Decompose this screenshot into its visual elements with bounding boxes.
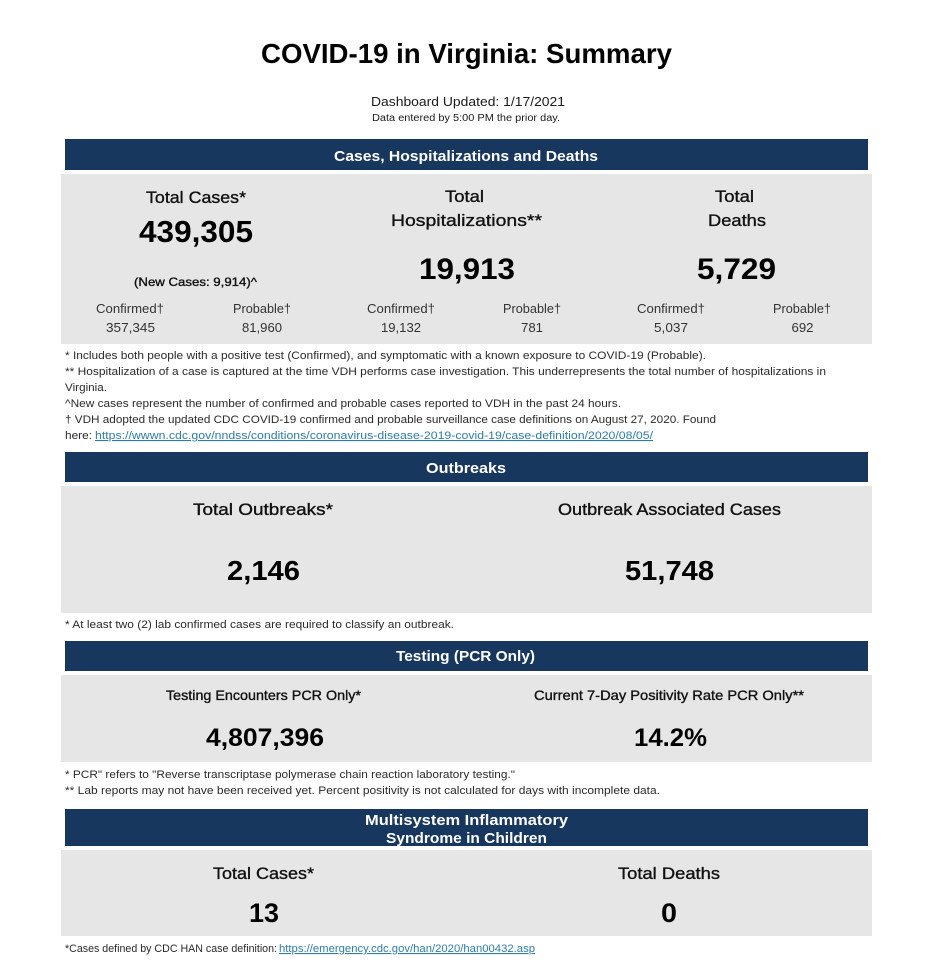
testing encounters: Testing Encounters PCR Only* [166, 687, 362, 703]
footnotes: cases: https://wwwn.cdc.gov/nndss/conditions/coronavirus-disease-2019-covid-19/case-definition/2020/08/05/ [95, 430, 654, 442]
panel: outbreaks [61, 486, 872, 613]
MIS-C total deaths [618, 864, 720, 928]
total hospitalizations: Total [445, 187, 484, 206]
footnotes: cases: * Includes both people with a positive test (Confirmed), and symptomatic with a known exposure to COVID-19 (Probable). [65, 350, 706, 362]
heading: testing: Testing (PCR Only) [396, 648, 535, 665]
positivity rate [534, 687, 805, 752]
total hospitalizations: Hospitalizations** [391, 211, 542, 230]
footnotes: cases [65, 350, 826, 442]
MIS-C total cases [213, 864, 314, 928]
heading: outbreaks: Outbreaks [426, 460, 506, 477]
total cases: Confirmed† [96, 302, 164, 316]
testing encounters: 4,807,396 [206, 724, 324, 752]
footnotes: cases: Virginia. [65, 382, 107, 394]
footnote: outbreaks: * At least two (2) lab confirmed cases are required to classify an outbreak. [65, 619, 454, 631]
panel: testing [61, 675, 872, 762]
footnotes: testing: * PCR" refers to "Reverse transcriptase polymerase chain reaction laboratory testing." [65, 769, 515, 781]
total hospitalizations: Probable† [503, 302, 561, 316]
heading: multisystem inflammatory syndrome in children: Syndrome in Children [386, 830, 547, 847]
total hospitalizations: 781 [521, 321, 543, 335]
outbreak associated cases: 51,748 [625, 555, 714, 586]
panel: cases, hospitalizations and deaths [61, 174, 872, 344]
MIS-C total cases: 13 [249, 898, 279, 928]
total deaths: 5,037 [654, 321, 688, 335]
footnotes: cases: here: [65, 430, 92, 442]
MIS-C total deaths: 0 [661, 898, 677, 928]
outbreak associated cases [558, 500, 781, 586]
footnotes: cases: ^New cases represent the number of confirmed and probable cases reported to VDH in the past 24 hours. [65, 398, 621, 410]
dashboard update text: Dashboard Updated: 1/17/2021 [371, 94, 565, 109]
total cases: 357,345 [106, 321, 155, 335]
total hospitalizations: 19,132 [381, 321, 421, 335]
footnotes: testing [65, 769, 660, 797]
total hospitalizations [367, 187, 561, 335]
dashboard update text [371, 94, 565, 124]
testing encounters [166, 687, 362, 752]
heading: multisystem inflammatory syndrome in children: Multisystem Inflammatory [365, 812, 569, 829]
total deaths: Confirmed† [637, 302, 705, 316]
total deaths: Probable† [773, 302, 831, 316]
heading: testing [65, 641, 868, 671]
heading: cases, hospitalizations and deaths: Cases, Hospitalizations and Deaths [334, 148, 598, 165]
total hospitalizations: Confirmed† [367, 302, 435, 316]
total cases: 439,305 [139, 214, 253, 249]
total cases: Probable† [233, 302, 291, 316]
positivity rate: 14.2% [634, 724, 707, 752]
panel: multisystem inflammatory syndrome in children [61, 850, 872, 936]
footnotes: cases: ** Hospitalization of a case is captured at the time VDH performs case investigation. This underrepresents the total number of hospitalizations in [65, 366, 826, 378]
total deaths: Total [715, 187, 754, 206]
dashboard update text: Data entered by 5:00 PM the prior day. [372, 113, 560, 124]
footnote: MIS-C case definition [65, 943, 535, 955]
heading: multisystem inflammatory syndrome in children [65, 809, 868, 847]
footnotes: testing: ** Lab reports may not have been received yet. Percent positivity is not calculated for days with incomplete data. [65, 785, 660, 797]
total outbreaks: Total Outbreaks* [193, 500, 333, 519]
total hospitalizations: 19,913 [419, 253, 515, 286]
MIS-C total deaths: Total Deaths [618, 864, 720, 883]
total outbreaks [193, 500, 333, 586]
footnote: MIS-C case definition: *Cases defined by CDC HAN case definition: [65, 943, 277, 955]
total deaths: 692 [792, 321, 814, 335]
total deaths [637, 187, 831, 335]
total outbreaks: 2,146 [227, 555, 300, 586]
footnote: MIS-C case definition: https://emergency.cdc.gov/han/2020/han00432.asp [279, 943, 535, 955]
MIS-C total cases: Total Cases* [213, 864, 314, 883]
title: COVID-19 in Virginia: Summary [261, 38, 672, 69]
total deaths: Deaths [708, 211, 766, 230]
total cases [96, 188, 291, 335]
outbreak associated cases: Outbreak Associated Cases [558, 500, 781, 519]
total cases: Total Cases* [146, 188, 246, 207]
total cases: 81,960 [242, 321, 282, 335]
heading: outbreaks [65, 452, 868, 482]
heading: cases, hospitalizations and deaths [65, 139, 868, 170]
footnotes: cases: † VDH adopted the updated CDC COVID-19 confirmed and probable surveillance case definitions on August 27, 2020. Found [65, 414, 716, 426]
total deaths: 5,729 [697, 253, 776, 286]
total cases: (New Cases: 9,914)^ [134, 275, 257, 289]
positivity rate: Current 7-Day Positivity Rate PCR Only** [534, 687, 805, 703]
